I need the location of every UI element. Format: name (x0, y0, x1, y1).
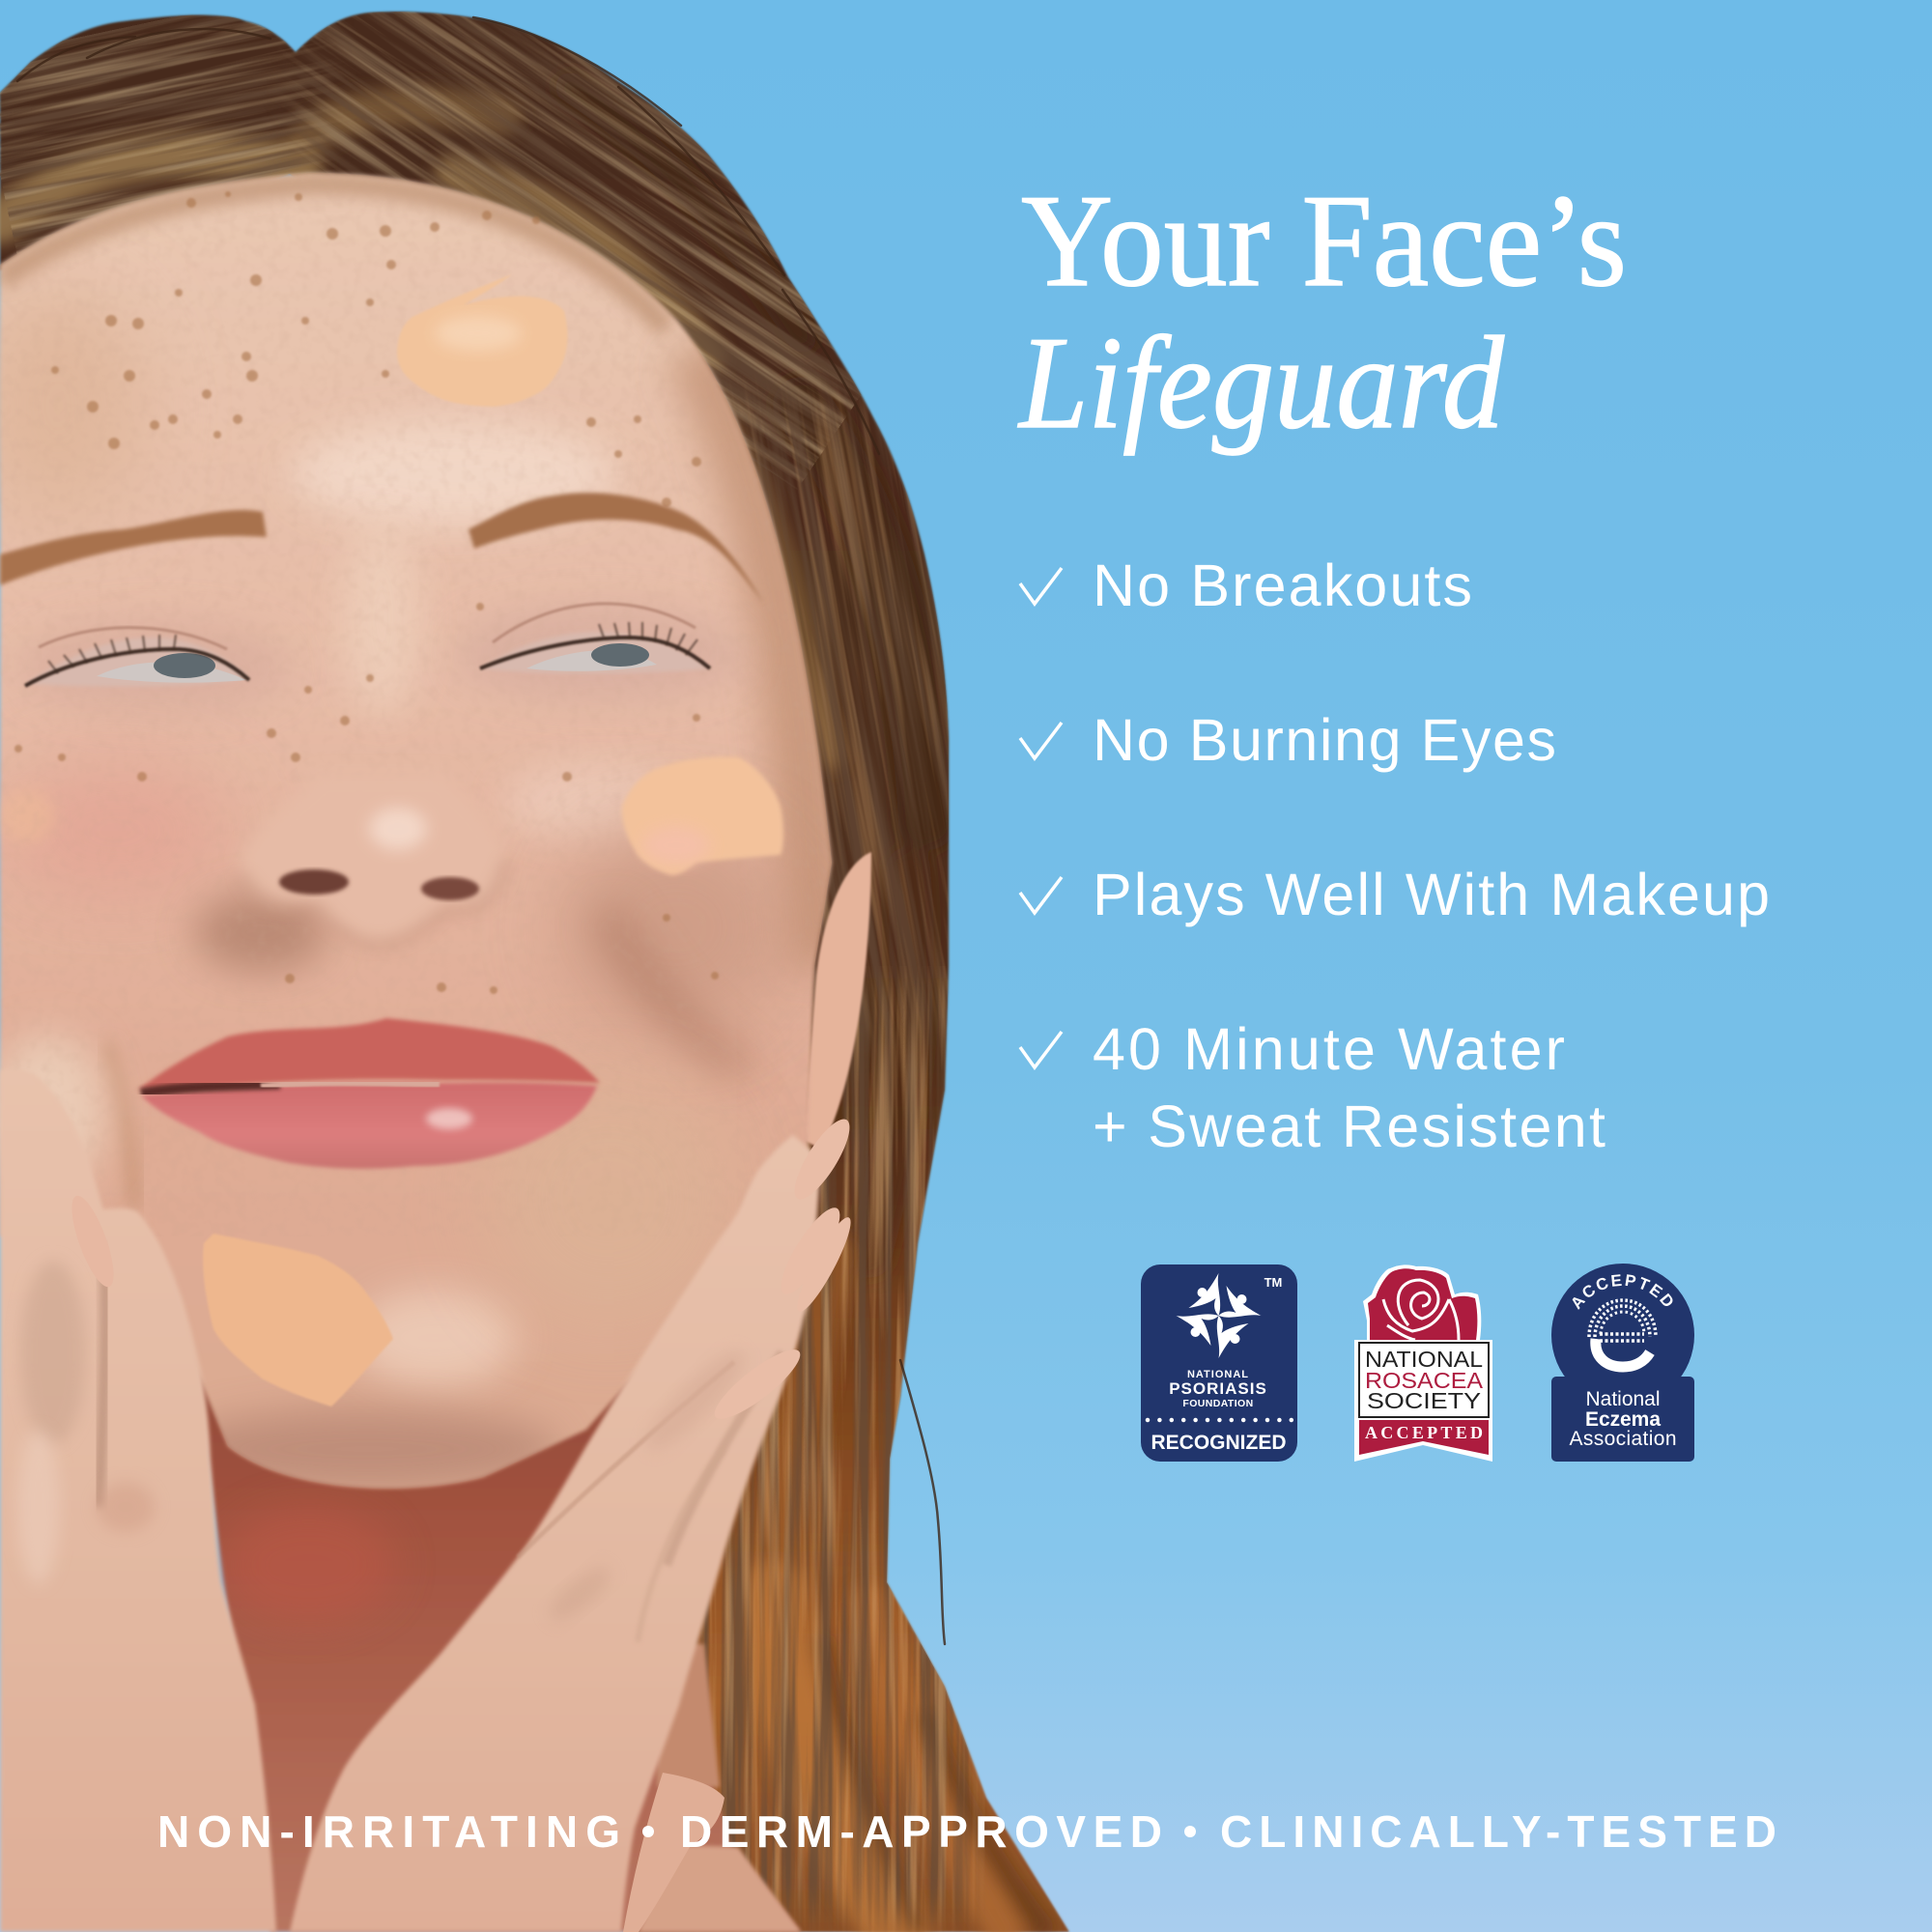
hand: right (290, 1135, 821, 1932)
badge: national eczema association: National (1586, 1388, 1660, 1410)
footer tagline: DERM-APPROVED (680, 1806, 1162, 1857)
badge: national psoriasis foundation: NATIONAL (1187, 1369, 1249, 1380)
stray hair wisps (17, 17, 945, 1644)
title line 1: Your Face’s (1021, 167, 1627, 314)
footer tagline: CLINICALLY-TESTED (1220, 1806, 1776, 1857)
badge: national eczema association: Association (1569, 1428, 1677, 1450)
footer tagline (157, 1806, 1776, 1857)
badge: national eczema association: ACCEPTED (1573, 1274, 1673, 1310)
nails: right hand (706, 1112, 859, 1429)
ear (804, 852, 871, 1150)
nail: left hand (64, 1191, 122, 1292)
badge: national eczema association: Eczema (1585, 1408, 1661, 1431)
item: water and sweat resistent (1093, 1016, 1605, 1159)
badge: national psoriasis foundation: TM (1264, 1275, 1282, 1290)
badge: national psoriasis foundation: PSORIASIS (1169, 1379, 1267, 1398)
benefits checklist (1020, 553, 1770, 1159)
footer tagline: NON-IRRITATING (157, 1806, 620, 1857)
hand: left (0, 1069, 276, 1932)
neck and chest (193, 1294, 801, 1932)
rose (1363, 1264, 1481, 1340)
freckles (14, 191, 748, 994)
sunscreen dabs (203, 274, 783, 1406)
badge: national rosacea society: ACCEPTED (1365, 1423, 1483, 1442)
lips (138, 1018, 600, 1169)
eyebrows (0, 493, 764, 604)
title line 2: Lifeguard (1017, 309, 1504, 456)
badge: national rosacea society: SOCIETY (1367, 1388, 1481, 1413)
stippled e logo (1589, 1300, 1656, 1367)
item: water and sweat resistent: + Sweat Resistent (1093, 1094, 1605, 1159)
face (0, 173, 832, 1489)
eyes (25, 604, 710, 686)
badge: national rosacea society: NATIONAL (1365, 1347, 1483, 1372)
photo: woman with sunscreen on face (0, 0, 1069, 1932)
badge: national rosacea society: ROSACEA (1365, 1368, 1484, 1393)
title (1017, 167, 1627, 456)
badge: national psoriasis foundation (1141, 1264, 1297, 1462)
nose (241, 773, 506, 946)
item: plays well with makeup: Plays Well With Makeup (1093, 862, 1770, 927)
check icons (1020, 568, 1062, 1067)
item: water and sweat resistent: 40 Minute Water (1093, 1016, 1565, 1082)
badge: national psoriasis foundation: RECOGNIZED (1151, 1432, 1287, 1454)
item: no burning eyes: No Burning Eyes (1093, 707, 1556, 773)
rosacea shield (1354, 1340, 1492, 1462)
skin shading (0, 164, 840, 1490)
badge: national psoriasis foundation: FOUNDATION (1182, 1398, 1254, 1409)
item: no breakouts: No Breakouts (1093, 553, 1472, 618)
badge: national eczema association (1551, 1264, 1694, 1462)
hair (0, 0, 1069, 1932)
badge: national rosacea society (1354, 1264, 1492, 1462)
psoriasis logo (1177, 1273, 1262, 1358)
